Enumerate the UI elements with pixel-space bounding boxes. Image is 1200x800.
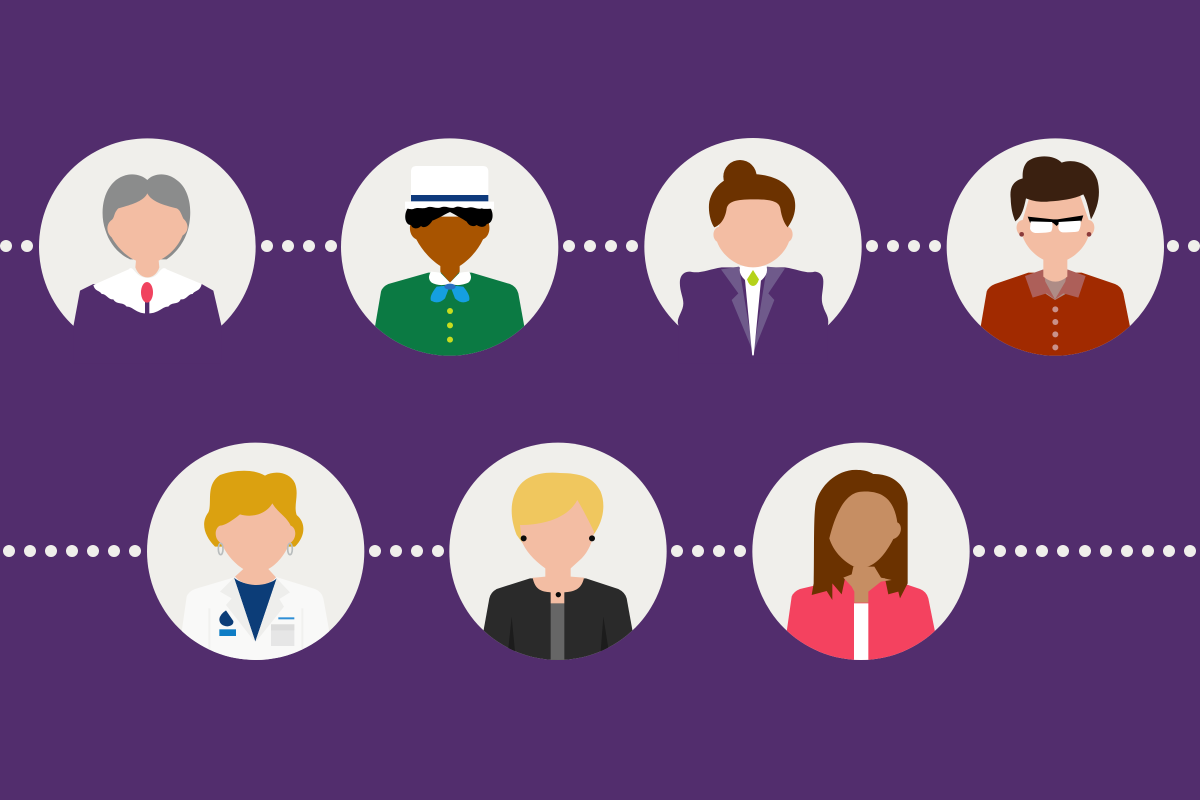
portrait: woman with hair bun and purple suit bbox=[644, 138, 862, 363]
portrait: woman with dark hair, glasses and red shirt bbox=[947, 138, 1164, 363]
portrait: woman with white hat and green uniform bbox=[341, 138, 558, 363]
portrait: blonde woman in black jacket bbox=[449, 443, 667, 668]
portrait: grey-haired woman with lace collar bbox=[39, 138, 256, 326]
portrait: woman with long brown hair and pink jacket bbox=[752, 443, 970, 668]
dotted line: top row bbox=[0, 240, 1200, 252]
infographic canvas bbox=[0, 138, 1200, 660]
dotted line: bottom row bbox=[3, 545, 1196, 557]
portrait: blonde doctor in white coat bbox=[147, 443, 364, 668]
